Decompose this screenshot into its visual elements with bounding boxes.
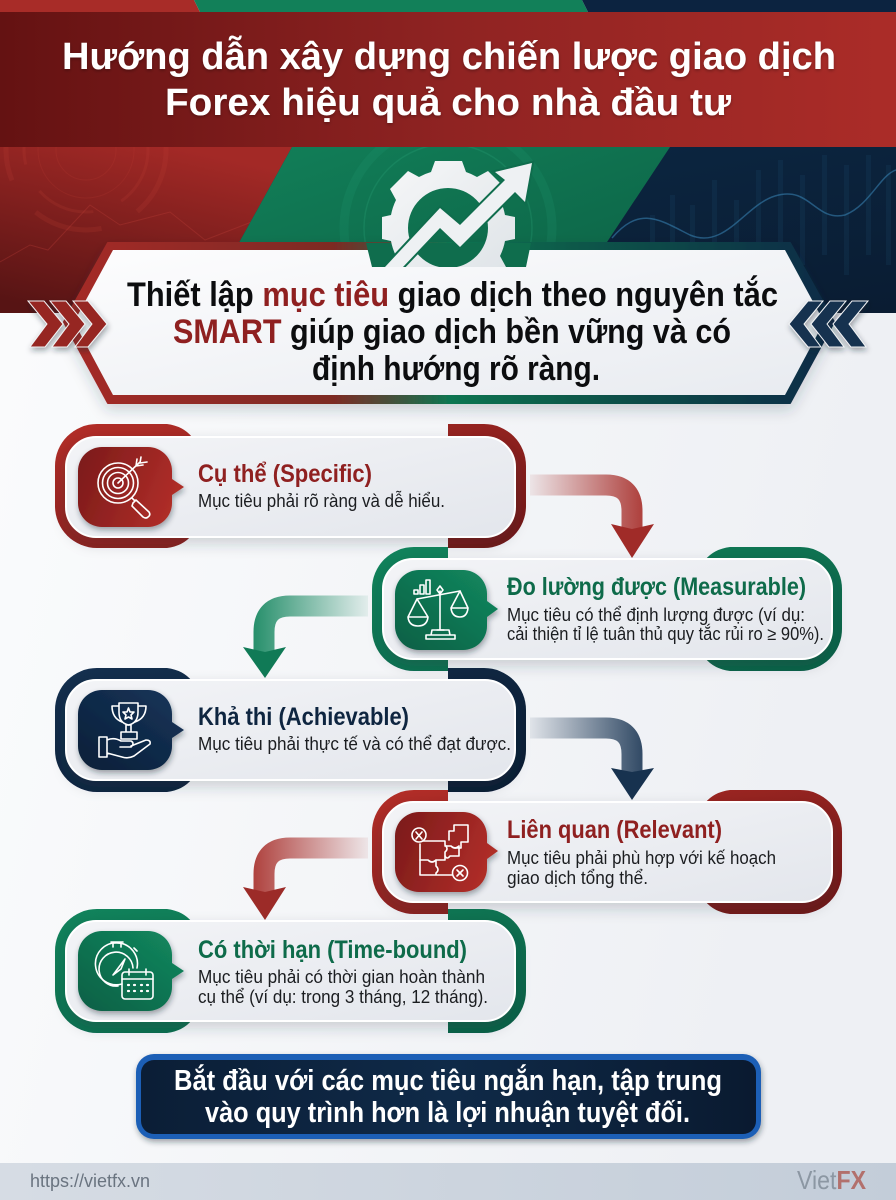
title: [62, 34, 836, 124]
text: Specific: Mục tiêu phải rõ ràng và dễ hiểu.: [198, 490, 445, 511]
text: Time-bound: Mục tiêu phải có thời gian hoàn thành: [198, 967, 485, 987]
callout text: [174, 1063, 722, 1129]
text: Relevant: Liên quan (Relevant): [507, 816, 722, 844]
banner text: định hướng rõ ràng.: [312, 350, 600, 388]
text: Specific: [198, 460, 445, 511]
footer url: https://vietfx.vn: [30, 1171, 150, 1191]
title: Hướng dẫn xây dựng chiến lược giao dịch: [62, 34, 836, 78]
callout: [136, 1054, 761, 1139]
arrow: specific to measurable: [530, 485, 654, 558]
card: Measurable: [372, 547, 842, 671]
callout text: Bắt đầu với các mục tiêu ngắn hạn, tập trung: [174, 1063, 722, 1097]
banner text: Thiết lập mục tiêu giao dịch theo nguyên tắc: [127, 276, 778, 314]
right chevrons: [789, 301, 868, 347]
card: Achievable: [55, 668, 526, 792]
callout text: vào quy trình hơn là lợi nhuận tuyệt đối.: [205, 1097, 690, 1129]
title: Forex hiệu quả cho nhà đầu tư: [165, 82, 731, 124]
arrow: measurable to achievable: [243, 606, 368, 678]
hero panel: red green navy sections: [0, 147, 896, 313]
text: Time-bound: [198, 936, 488, 1007]
text: Measurable: [507, 573, 824, 644]
text: Time-bound: Có thời hạn (Time-bound): [198, 936, 467, 964]
summary banner: [64, 161, 834, 403]
text: Time-bound: cụ thể (ví dụ: trong 3 tháng, 12 tháng).: [198, 987, 488, 1007]
text: Achievable: Khả thi (Achievable): [198, 703, 409, 731]
text: Achievable: [198, 703, 511, 754]
icon: gear with rising arrow: [382, 161, 532, 268]
footer bar: [0, 1163, 896, 1200]
text: Relevant: [507, 816, 776, 888]
icon box: scales: [395, 570, 498, 650]
text: Relevant: Mục tiêu phải phù hợp với kế hoạch: [507, 848, 776, 868]
icon box: stopwatch and calendar: [78, 931, 184, 1011]
icon box: target and magnifier: [78, 447, 184, 527]
card: Specific: [55, 424, 526, 548]
text: Measurable: cải thiện tỉ lệ tuân thủ quy tắc rủi ro ≥ 90%).: [507, 623, 824, 644]
text: Relevant: giao dịch tổng thể.: [507, 868, 648, 888]
arrow: achievable to relevant: [530, 728, 654, 800]
icon box: trophy in hand: [78, 690, 184, 770]
left chevrons: [28, 301, 107, 347]
arrow: relevant to time-bound: [243, 848, 368, 920]
header band: [0, 12, 896, 147]
banner text: SMART giúp giao dịch bền vững và có: [173, 313, 731, 351]
top colour strip: [0, 0, 896, 12]
text: Specific: Cụ thể (Specific): [198, 460, 372, 488]
icon box: puzzle: [395, 812, 498, 892]
gear notch: [366, 243, 531, 267]
text: Measurable: Đo lường được (Measurable): [507, 573, 806, 601]
card: Relevant: [372, 790, 842, 914]
card: Time-bound: [55, 909, 526, 1033]
text: Measurable: Mục tiêu có thể định lượng được (ví dụ:: [507, 605, 805, 625]
text: Achievable: Mục tiêu phải thực tế và có thể đạt được.: [198, 734, 511, 754]
banner text: [127, 276, 778, 388]
logo: VietFX: VietFX: [797, 1165, 867, 1195]
